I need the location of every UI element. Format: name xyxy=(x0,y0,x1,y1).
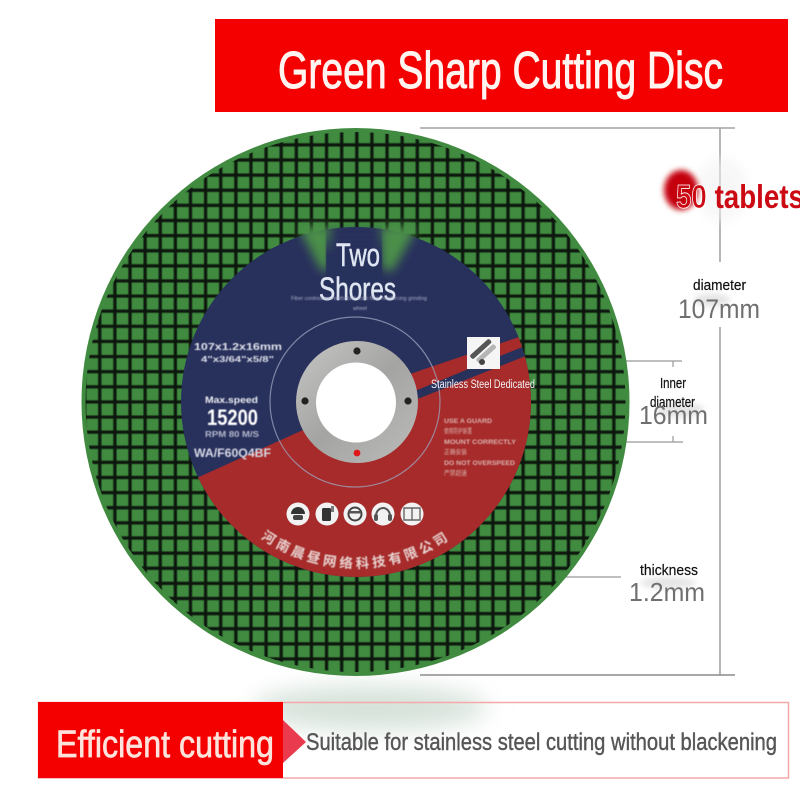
feature bar outline xyxy=(38,702,788,778)
size specification text: 107x1.2x16mm xyxy=(194,342,282,353)
product description small text: wheel xyxy=(352,306,367,312)
safety warnings: USE A GUARD xyxy=(444,418,492,425)
navy fade behind brand xyxy=(326,224,382,294)
icon: manual book xyxy=(400,502,424,526)
thickness spec: 1.2mm xyxy=(629,577,705,607)
max speed block: WA/F60Q4BF xyxy=(194,446,271,460)
disc reflection shadow xyxy=(252,686,488,730)
max speed block: RPM 80 M/S xyxy=(205,430,260,439)
disc mesh grid xyxy=(81,128,630,676)
icon: material tubes xyxy=(467,337,500,369)
safety icons row xyxy=(286,502,424,526)
thickness spec: thickness xyxy=(640,562,698,579)
brand: Two Shores: Two xyxy=(336,237,380,273)
product description small text xyxy=(291,296,427,312)
brand: Two Shores: Shores xyxy=(319,271,396,307)
brand: Two Shores xyxy=(319,237,396,307)
max speed block xyxy=(194,395,271,460)
inner diameter spec: 16mm xyxy=(639,400,708,430)
flange rivets xyxy=(301,347,412,456)
red badge blob xyxy=(664,170,698,210)
metal flange xyxy=(296,341,418,463)
green fade over label top xyxy=(298,226,418,272)
max speed block: 15200 xyxy=(207,405,258,430)
safety warnings: DO NOT OVERSPEED xyxy=(444,460,515,467)
inner diameter spec: Inner xyxy=(660,376,686,392)
centre hole xyxy=(316,362,396,442)
feature bar xyxy=(38,702,788,778)
diameter spec: 107mm xyxy=(678,294,760,324)
inner diameter spec xyxy=(639,376,708,430)
icon: face shield xyxy=(344,502,366,526)
safety warnings: MOUNT CORRECTLY xyxy=(444,439,517,446)
safety warnings: 正确安装 xyxy=(444,447,467,456)
stainless steel label: Stainless Steel Dedicated xyxy=(431,379,535,391)
safety warnings xyxy=(444,418,517,477)
max speed block: Max.speed xyxy=(205,395,258,406)
label red section xyxy=(198,337,531,577)
label base navy xyxy=(181,227,531,577)
feature heading: Efficient cutting xyxy=(56,724,274,766)
arrow pointer xyxy=(283,720,306,763)
safety warnings: 严禁超速 xyxy=(444,468,467,477)
dimension lines xyxy=(420,128,735,675)
cutting disc xyxy=(81,128,630,676)
diameter spec xyxy=(678,277,760,324)
product description small text: Fiber continuous reinforced resin fiber reinforcing grinding xyxy=(291,296,427,302)
disc abrasive body xyxy=(82,128,630,676)
icon: respirator xyxy=(316,502,338,526)
diameter spec: diameter xyxy=(693,277,746,294)
size specification text xyxy=(194,342,282,364)
thickness spec xyxy=(629,562,705,607)
company name on arc: 河南晨昼网络科技有限公司 xyxy=(260,529,448,570)
thin ring xyxy=(270,317,440,487)
safety warnings: 使用防护装置 xyxy=(444,426,472,435)
size specification text: 4"x3/64"x5/8" xyxy=(201,354,274,364)
icon: helmet xyxy=(286,502,310,526)
title banner xyxy=(215,19,788,112)
icon: ear protection xyxy=(372,502,394,526)
inner diameter spec: diameter xyxy=(650,394,695,411)
quantity badge: 50 tablets xyxy=(664,158,800,222)
red feature label xyxy=(38,702,283,778)
